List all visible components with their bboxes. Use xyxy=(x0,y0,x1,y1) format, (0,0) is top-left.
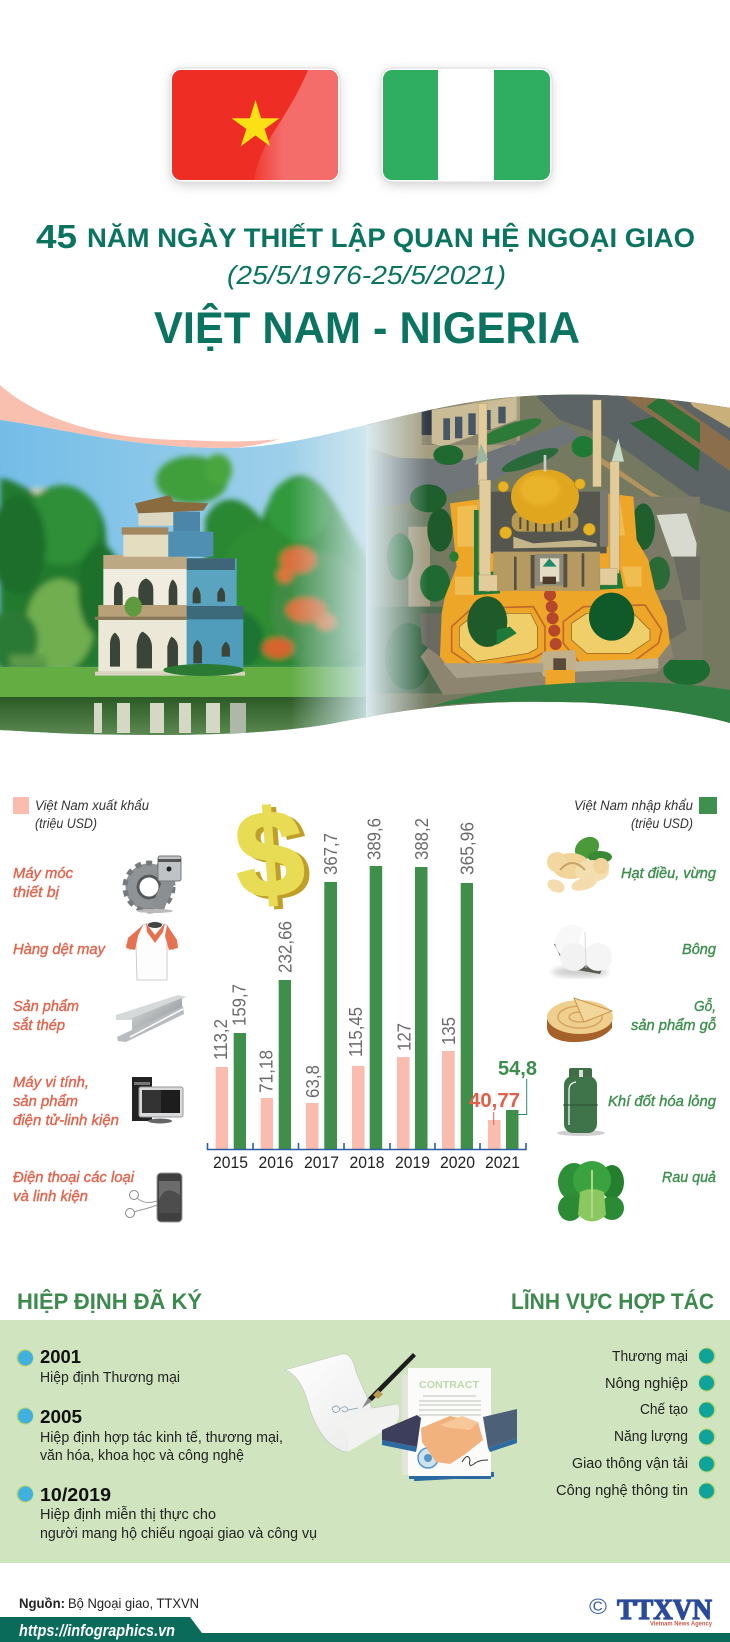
year labels: 2018 xyxy=(350,1154,384,1172)
photo: National Mosque, Abuja xyxy=(366,380,730,740)
value labels: 367,7 xyxy=(321,833,341,875)
year labels: 2016 xyxy=(258,1154,294,1172)
bars: Vietnam exports xyxy=(216,1051,500,1149)
year labels: 2017 xyxy=(304,1154,339,1172)
green wave xyxy=(433,682,730,723)
trees on plaza xyxy=(467,596,507,647)
import product labels xyxy=(608,865,717,1186)
plaza xyxy=(440,493,670,670)
pen xyxy=(362,1353,416,1408)
footer band xyxy=(0,1617,730,1642)
export product labels: Điện thoại các loại xyxy=(13,1169,135,1186)
value labels: 63,8 xyxy=(303,1065,323,1098)
panel: green background xyxy=(0,1320,730,1563)
flag: Vietnam xyxy=(170,68,340,184)
callout: 2021 export xyxy=(469,1090,520,1125)
year labels xyxy=(213,1154,520,1172)
value labels xyxy=(211,818,478,1098)
legend: imports xyxy=(574,797,717,831)
agreement: 2001: 2001 xyxy=(40,1347,81,1367)
dollar sign: $ xyxy=(236,787,313,927)
value labels: 388,2 xyxy=(412,818,432,860)
icon: wood log xyxy=(547,998,613,1042)
tower xyxy=(95,495,245,676)
source: Nguồn: xyxy=(19,1595,65,1611)
callout: 2021 import xyxy=(498,1058,537,1114)
logo: TTXVN: © xyxy=(589,1594,607,1619)
import product labels: Bông xyxy=(682,941,717,958)
legend: imports: Việt Nam nhập khẩu xyxy=(574,798,693,813)
cooperation list: Công nghệ thông tin xyxy=(556,1483,688,1499)
cooperation list xyxy=(556,1348,716,1500)
flag: Nigeria xyxy=(381,68,552,184)
axis xyxy=(208,1143,526,1150)
legend: exports xyxy=(13,797,149,831)
export product labels: và linh kiện xyxy=(13,1188,88,1205)
illustration: contract and handshake xyxy=(285,1353,517,1481)
photo band: Hanoi and Abuja xyxy=(0,380,730,740)
cooperation list: Nông nghiệp xyxy=(605,1376,688,1392)
value labels: 365,96 xyxy=(458,822,478,875)
export product labels: điện tử-linh kiện xyxy=(13,1112,119,1129)
city roads and greenery xyxy=(368,396,520,460)
icon: leafy vegetable xyxy=(558,1161,624,1222)
scroll paper xyxy=(285,1354,399,1452)
export product labels: sắt thép xyxy=(13,1017,65,1034)
title: NĂM NGÀY THIẾT LẬP QUAN HỆ NGOẠI GIAO xyxy=(87,223,695,253)
export product labels: Sản phẩm xyxy=(13,998,79,1015)
agreement: 2005 xyxy=(16,1407,283,1464)
export product labels: thiết bị xyxy=(13,884,60,901)
export product labels: Máy móc xyxy=(13,865,73,882)
contract document xyxy=(402,1368,494,1481)
logo: TTXVN: TTXVN xyxy=(617,1594,712,1626)
pink wave xyxy=(0,385,280,448)
icon: smartphone and earphones xyxy=(126,1173,182,1222)
value labels: 113,2 xyxy=(211,1019,231,1060)
footer band: https://infographics.vn xyxy=(19,1622,175,1640)
import product labels: Gỗ, xyxy=(694,998,716,1015)
heading: cooperation fields: LĨNH VỰC HỢP TÁC xyxy=(511,1289,714,1314)
import product labels: sản phẩm gỗ xyxy=(631,1017,717,1034)
agreement: 10/2019 xyxy=(16,1485,317,1542)
photo: Turtle Tower, Hanoi xyxy=(0,400,372,740)
logo: TTXVN: Vietnam News Agency xyxy=(650,1620,712,1628)
source: Bộ Ngoại giao, TTXVN xyxy=(68,1595,199,1611)
year labels: 2021 xyxy=(485,1154,520,1172)
bar chart xyxy=(208,818,537,1172)
agreement: 2001: Hiệp định Thương mại xyxy=(40,1370,180,1386)
agreement: 10/2019: Hiệp định miễn thị thực cho xyxy=(40,1506,216,1523)
export product labels: Máy vi tính, xyxy=(13,1074,89,1091)
bars: Vietnam imports xyxy=(234,866,518,1149)
export product labels: Hàng dệt may xyxy=(13,941,106,958)
icon: polo shirt xyxy=(126,922,178,980)
gate xyxy=(538,650,577,677)
dollar sign: $ xyxy=(231,784,308,924)
value labels: 232,66 xyxy=(276,921,296,973)
icon: gas cylinder xyxy=(557,1068,605,1136)
agreement: 2005: văn hóa, khoa học và công nghệ xyxy=(40,1448,244,1464)
minarets xyxy=(478,400,619,592)
import product labels: Hạt điều, vừng xyxy=(621,865,717,882)
title: VIỆT NAM - NIGERIA xyxy=(154,303,580,353)
building xyxy=(474,510,479,573)
cooperation list: Giao thông vận tải xyxy=(572,1456,688,1472)
sleeves and hands xyxy=(382,1409,517,1464)
export product labels xyxy=(13,865,135,1205)
icon: machinery gear and piston xyxy=(125,856,181,913)
cooperation list: Thương mại xyxy=(612,1349,688,1365)
title: 45 xyxy=(36,218,77,255)
icon: cashews and leaves xyxy=(545,832,612,895)
agreement: 2005: 2005 xyxy=(40,1407,82,1427)
export product labels: sản phẩm xyxy=(13,1093,78,1110)
icon: desktop computer xyxy=(132,1077,183,1124)
value labels: 389,6 xyxy=(365,818,385,860)
icon: steel I-beam xyxy=(116,995,187,1042)
cooperation list: Chế tạo xyxy=(640,1402,688,1418)
import product labels: Khí đốt hóa lỏng xyxy=(608,1093,717,1110)
source xyxy=(19,1595,199,1611)
icon: cotton boll xyxy=(552,925,613,977)
cooperation list: Năng lượng xyxy=(614,1429,688,1445)
agreement: 2001 xyxy=(16,1347,180,1386)
callout: 2021 import: 54,8 xyxy=(498,1058,537,1080)
stone base xyxy=(421,633,673,695)
agreement: 10/2019: 10/2019 xyxy=(40,1485,111,1505)
year labels: 2015 xyxy=(213,1154,248,1172)
agreement: 10/2019: người mang hộ chiếu ngoại giao và công vụ xyxy=(40,1526,317,1542)
legend: imports: (triệu USD) xyxy=(631,816,693,831)
agreement list xyxy=(16,1347,317,1542)
callout: 2021 export: 40,77 xyxy=(469,1090,520,1112)
value labels: 135 xyxy=(439,1017,459,1045)
year labels: 2020 xyxy=(440,1154,475,1172)
agreement: 2005: Hiệp định hợp tác kinh tế, thương mại, xyxy=(40,1430,283,1446)
value labels: 159,7 xyxy=(230,984,250,1026)
title: (25/5/1976-25/5/2021) xyxy=(227,260,506,290)
contract document: CONTRACT xyxy=(419,1379,480,1391)
legend: exports: (triệu USD) xyxy=(35,816,97,831)
left photo fade xyxy=(294,425,372,728)
legend: exports: Việt Nam xuất khẩu xyxy=(35,798,149,813)
value labels: 115,45 xyxy=(346,1007,366,1057)
import product labels: Rau quả xyxy=(662,1169,716,1186)
year labels: 2019 xyxy=(395,1154,430,1172)
tower reflection xyxy=(94,703,246,733)
heading: signed agreements: HIỆP ĐỊNH ĐÃ KÝ xyxy=(17,1289,202,1314)
value labels: 71,18 xyxy=(256,1050,276,1093)
title xyxy=(36,218,695,353)
value labels: 127 xyxy=(395,1023,415,1051)
right photo fade xyxy=(366,412,426,718)
